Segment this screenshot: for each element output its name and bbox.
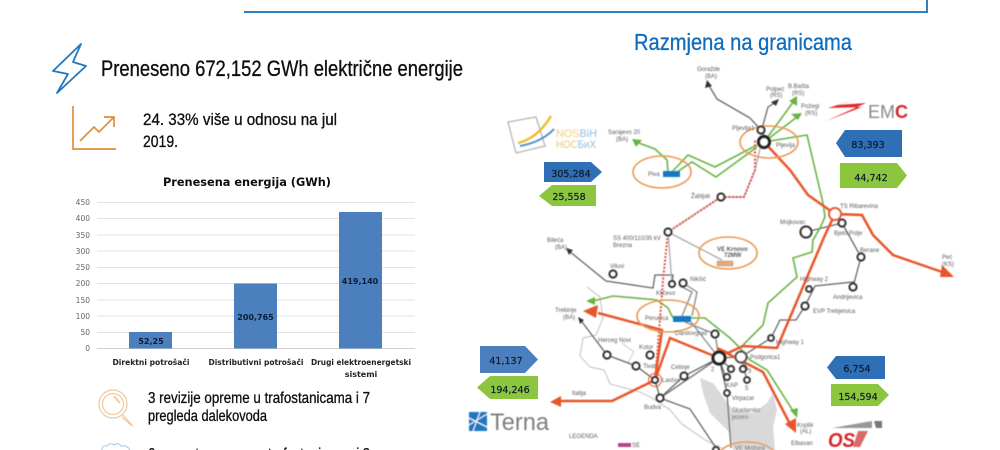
flow: Terna export (480, 346, 538, 373)
category labels: Direktni potrošači (112, 357, 190, 367)
map place labels: SE (632, 443, 640, 449)
map place labels: Tivat (643, 364, 656, 370)
map place labels: Vilusi (610, 264, 624, 270)
logo: NOSBiH: НОСБиХ (556, 139, 597, 151)
orange zones (633, 126, 798, 450)
map place labels: Highway 1 (776, 340, 805, 346)
grey transmission lines (569, 84, 861, 448)
axis values: 150 (76, 296, 90, 305)
map place labels: Andrijevica (833, 295, 863, 301)
map place labels: Trebinje (555, 308, 577, 314)
map place labels: Žabljak (691, 192, 711, 200)
flow: OST export: 6,754 (843, 364, 871, 375)
map place labels: Mojkovac (780, 220, 805, 226)
logo: OST (828, 421, 882, 450)
logo: NOSBiH (508, 116, 597, 153)
map place labels: (BA) (705, 74, 717, 80)
flow: OST import: 154,594 (838, 392, 878, 403)
map place labels: EVP Trebjelsica (813, 309, 856, 315)
map place labels: Highway 2 (800, 277, 829, 283)
map place labels: Danilovgrad (675, 331, 707, 337)
substation nodes (604, 126, 864, 450)
left column (53, 44, 463, 450)
bar values: 52,25 (138, 337, 164, 346)
flow: EMC export: 83,393 (851, 140, 885, 151)
icon: magnifier (99, 390, 132, 426)
flow: NOSBiH export (544, 162, 602, 182)
bars (129, 212, 382, 348)
map place labels: 2 (711, 367, 715, 373)
category labels: Distributivni potrošači (208, 357, 304, 367)
map place labels: TS Ribarevina (840, 204, 879, 210)
map place labels: Peć (942, 255, 952, 261)
map place labels: Bjelo Polje (834, 231, 863, 237)
map place labels: Virpazar (732, 396, 754, 402)
map place labels: Italija (572, 391, 587, 397)
flow: Terna export: 41,137 (489, 356, 523, 367)
legend swatch (618, 443, 631, 447)
map place labels: Skadarsko (732, 408, 761, 414)
map place labels: Lastva (662, 378, 680, 384)
orange-red arrowheads (550, 265, 954, 433)
map place labels: Nikšić (690, 277, 706, 283)
map place labels: Berane (860, 248, 880, 254)
map place labels: (BA) (563, 315, 575, 321)
flow: EMC import: 44,742 (854, 173, 888, 184)
heading: border exchange: Razmjena na granicama (634, 29, 852, 55)
map place labels: (BA) (616, 137, 628, 143)
flow: OST import (831, 384, 889, 406)
axis values: 350 (76, 231, 90, 240)
icon: rising chart (73, 106, 116, 149)
map place labels: Herceg Novi (598, 338, 631, 344)
map place labels: Goražde (697, 67, 721, 73)
map place labels: Kotor (639, 345, 653, 351)
text: inspections: 3 revizije opreme u trafostanicama i 7 (148, 390, 370, 407)
icon: gear (102, 444, 130, 450)
icon: lightning bolt (53, 44, 86, 93)
red dotted line (655, 140, 755, 380)
map place labels: (AL) (800, 429, 811, 435)
grey arrowheads (566, 80, 779, 324)
axis values: 200 (76, 279, 90, 288)
map place labels: SS 400/110/35 kV (613, 236, 661, 242)
map place labels: Sarajevo 20 (608, 130, 641, 136)
map place labels: (KS) (942, 262, 954, 268)
axis values: 400 (76, 214, 90, 223)
map place labels: B.Bašta (788, 84, 810, 90)
bar values (138, 277, 379, 346)
text: comparison with July 2019: 2019. (143, 132, 178, 151)
flow: Terna import (477, 376, 538, 399)
map place labels: (RS) (792, 91, 804, 97)
bar chart: transferred energy (76, 175, 415, 379)
map place labels: (RS) (770, 93, 782, 99)
map place labels: KAP (726, 383, 738, 389)
axis values: 100 (76, 312, 90, 321)
map place labels: 3 (748, 369, 752, 375)
axis values: 300 (76, 247, 90, 256)
category labels: Drugi elektroenergetski (311, 358, 411, 367)
axis values: 450 (76, 198, 90, 207)
map place labels: jezero (731, 415, 749, 421)
category labels: sistemi (345, 370, 378, 379)
heading: transferred energy: Preneseno 672,152 GWh električne energije (101, 56, 463, 81)
map place labels: Požegi (801, 104, 819, 110)
flow: NOSBiH import: 25,558 (552, 192, 586, 203)
green arrowheads (586, 96, 802, 418)
map place labels: Brezna (613, 243, 633, 249)
map place labels: (BA) (555, 245, 567, 251)
flow: Terna import: 194,246 (490, 385, 530, 396)
map place labels: 72MW (724, 253, 742, 259)
text: comparison with July 2019: 24. 33% više u odnosu na jul (143, 110, 337, 129)
logo: EMC (826, 98, 908, 122)
map place labels: Elbasan (791, 441, 813, 447)
flow: NOSBiH import (539, 185, 596, 206)
logo: NOSBiH: NOSBiH (556, 128, 597, 140)
map place labels: (RS) (805, 111, 817, 117)
flow: EMC export (836, 130, 902, 157)
map place labels: Bileća (547, 238, 564, 244)
map place labels (547, 67, 954, 450)
map place labels: VE Krnovo (717, 247, 748, 253)
logo: Terna: Terna (490, 409, 550, 436)
bar values: 419,140 (342, 277, 379, 286)
green lines (593, 101, 825, 414)
map place labels: LEGENDA (569, 434, 598, 440)
axis values: 50 (80, 328, 90, 337)
lake and coastline (580, 287, 777, 450)
map place labels: Budva (644, 405, 662, 411)
axis values (76, 198, 90, 353)
map place labels: Perućica (645, 316, 669, 322)
map place labels: Piva (648, 172, 660, 178)
network map (547, 67, 954, 450)
map place labels: Pljevlja1 (732, 126, 755, 132)
orange-red lines (560, 142, 945, 424)
chart title: Prenesena energija (GWh) (163, 175, 331, 189)
axis values: 250 (76, 263, 90, 272)
map place labels: Kličevo (656, 291, 676, 297)
map place labels: Pljevlja (776, 143, 796, 149)
flow: NOSBiH export: 305,284 (551, 169, 591, 180)
flow: OST export (827, 356, 885, 379)
substation rectangles (663, 171, 733, 322)
map place labels: Cetinje (671, 365, 690, 371)
flow: EMC import (840, 163, 907, 188)
map place labels: Polpeć (766, 87, 784, 93)
map place labels: Koplik (797, 423, 814, 429)
logo: EMC: EMC (868, 102, 908, 122)
map place labels: Podgorica1 (750, 355, 781, 361)
map place labels: 5 (745, 386, 749, 392)
category labels (112, 357, 411, 379)
text: inspections: pregleda dalekovoda (148, 408, 267, 425)
axis values: 0 (85, 344, 90, 353)
bar values: 200,765 (237, 313, 274, 322)
